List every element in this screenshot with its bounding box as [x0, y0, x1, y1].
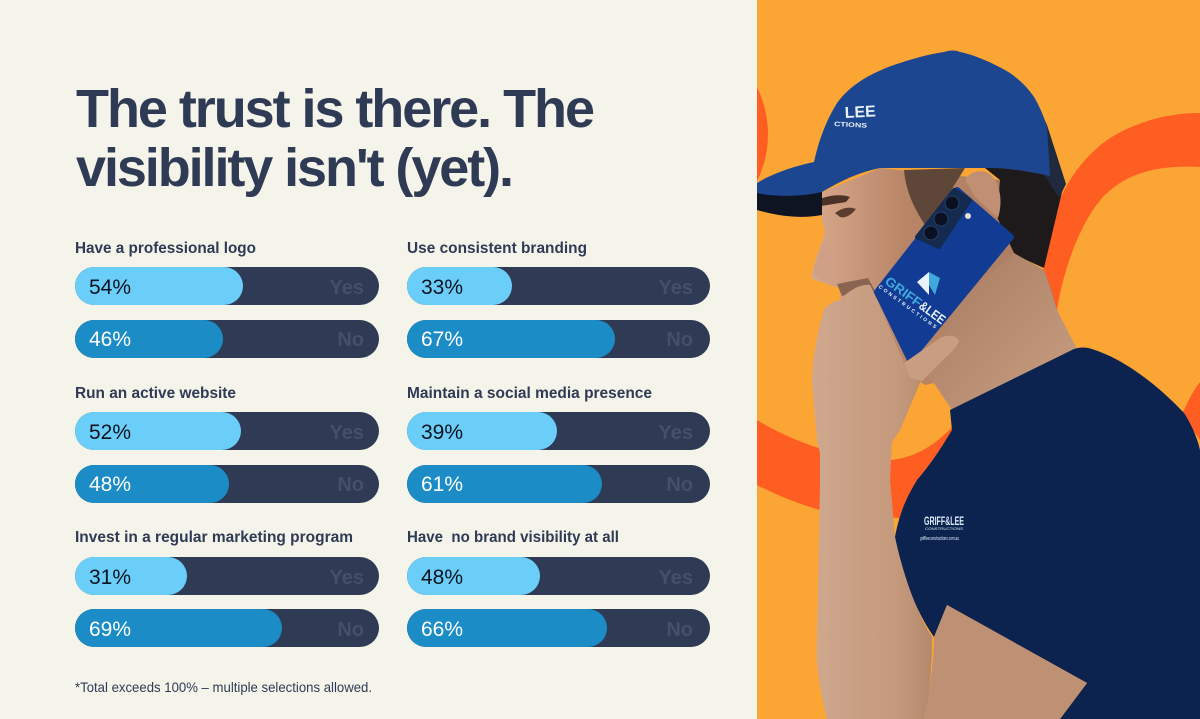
- t-shirt: [895, 348, 1200, 719]
- bar: yes 54%: [75, 267, 379, 305]
- phone logo text: CONSTRUCTIONS: [877, 284, 938, 331]
- forearm and hand: [812, 285, 959, 719]
- shirt logo: GRIFF&LEE: [924, 514, 964, 528]
- footnote: *Total exceeds 100% – multiple selections allowed.: [75, 679, 372, 695]
- phone logo text: GRIFF: [882, 273, 925, 310]
- label: Run an active website: [75, 385, 236, 402]
- ear: [965, 171, 1000, 218]
- title: visibility isn't (yet).: [76, 138, 514, 198]
- bar: no 66%: 66%: [421, 618, 463, 641]
- label: Maintain a social media presence: [407, 385, 652, 402]
- panel: orange photo background: [757, 0, 1200, 719]
- label: Have no brand visibility at all: [407, 529, 619, 546]
- bar: yes 52%: 52%: [89, 421, 131, 444]
- bar: yes 48%: 48%: [421, 566, 463, 589]
- bar: no 66%: [407, 609, 710, 647]
- bar: no 67%: No: [666, 329, 693, 351]
- bar: yes 31%: 31%: [89, 566, 131, 589]
- cap logo: CTIONS: [834, 121, 868, 130]
- hair: [980, 164, 1062, 268]
- panel: have a professional logo: [75, 240, 379, 358]
- left panel background: [0, 0, 757, 719]
- bar: yes 31%: Yes: [330, 567, 364, 589]
- bar: no 69%: [75, 609, 379, 647]
- title: The trust is there. The: [76, 79, 595, 139]
- phone logo text: [877, 272, 949, 332]
- phone logo mark: [917, 272, 929, 295]
- bar: no 48%: [75, 465, 379, 503]
- bar: no 48%: No: [337, 474, 364, 496]
- shirt logo: CONSTRUCTIONS: [925, 526, 963, 531]
- bar: yes 33%: 33%: [421, 276, 463, 299]
- cap crown and brim: [757, 50, 1050, 196]
- bar: no 66%: No: [666, 619, 693, 641]
- face and neck: [812, 168, 1078, 410]
- bar: yes 33%: Yes: [659, 277, 693, 299]
- cap logo: LEE: [844, 103, 876, 122]
- bar: yes 39%: Yes: [659, 422, 693, 444]
- bar: no 67%: 67%: [421, 328, 463, 351]
- bar: yes 48%: Yes: [659, 567, 693, 589]
- bar: yes 33%: [407, 267, 710, 305]
- bar: yes 54%: 54%: [89, 276, 131, 299]
- bar: no 61%: [407, 465, 710, 503]
- cap logo: [834, 103, 876, 130]
- panel: invest in a regular marketing program: [75, 529, 379, 647]
- bar: yes 52%: Yes: [330, 422, 364, 444]
- label: Use consistent branding: [407, 240, 587, 257]
- bar: no 46%: [75, 320, 379, 358]
- stubble: [837, 278, 880, 300]
- neck shading: [925, 253, 1077, 410]
- label: Invest in a regular marketing program: [75, 529, 353, 546]
- bar: no 69%: No: [337, 619, 364, 641]
- person on a phone: [757, 50, 1200, 719]
- bar: no 46%: 46%: [89, 328, 131, 351]
- eyebrow: [820, 195, 850, 206]
- arm and hand: [812, 285, 1087, 719]
- upper arm: [924, 605, 1087, 719]
- orange swirl graphic: [757, 87, 1200, 719]
- panel: have no brand visibility at all: [407, 529, 710, 647]
- bar: yes 48%: [407, 557, 710, 595]
- label: Have a professional logo: [75, 240, 256, 257]
- cap: [757, 50, 1066, 217]
- sideburn: [904, 168, 965, 225]
- camera lenses: [924, 196, 959, 240]
- bar: no 69%: 69%: [89, 618, 131, 641]
- bar: yes 54%: Yes: [330, 277, 364, 299]
- bar: yes 39%: 39%: [421, 421, 463, 444]
- eye: [835, 208, 856, 217]
- bar: no 67%: [407, 320, 710, 358]
- phone: [877, 190, 1011, 360]
- phone logo text: &LEE: [916, 298, 949, 327]
- cap underside: [757, 188, 822, 217]
- bar: yes 31%: [75, 557, 379, 595]
- bar: no 48%: 48%: [89, 473, 131, 496]
- shirt logo: [920, 514, 964, 542]
- flash: [965, 213, 971, 219]
- panel: run an active website: [75, 385, 379, 503]
- thumb over phone: [904, 336, 959, 381]
- nose highlight: [813, 238, 833, 281]
- panel: use consistent branding: [407, 240, 710, 358]
- panel: maintain a social media presence: [407, 385, 710, 503]
- cap back strap: [1034, 97, 1066, 198]
- title: [76, 79, 595, 198]
- bar: no 61%: 61%: [421, 473, 463, 496]
- camera island: [917, 190, 970, 247]
- bar: no 46%: No: [337, 329, 364, 351]
- bar: yes 39%: [407, 412, 710, 450]
- shirt logo: griffleeconstructions.com.au: [920, 536, 959, 542]
- bar: no 61%: No: [666, 474, 693, 496]
- bar: yes 52%: [75, 412, 379, 450]
